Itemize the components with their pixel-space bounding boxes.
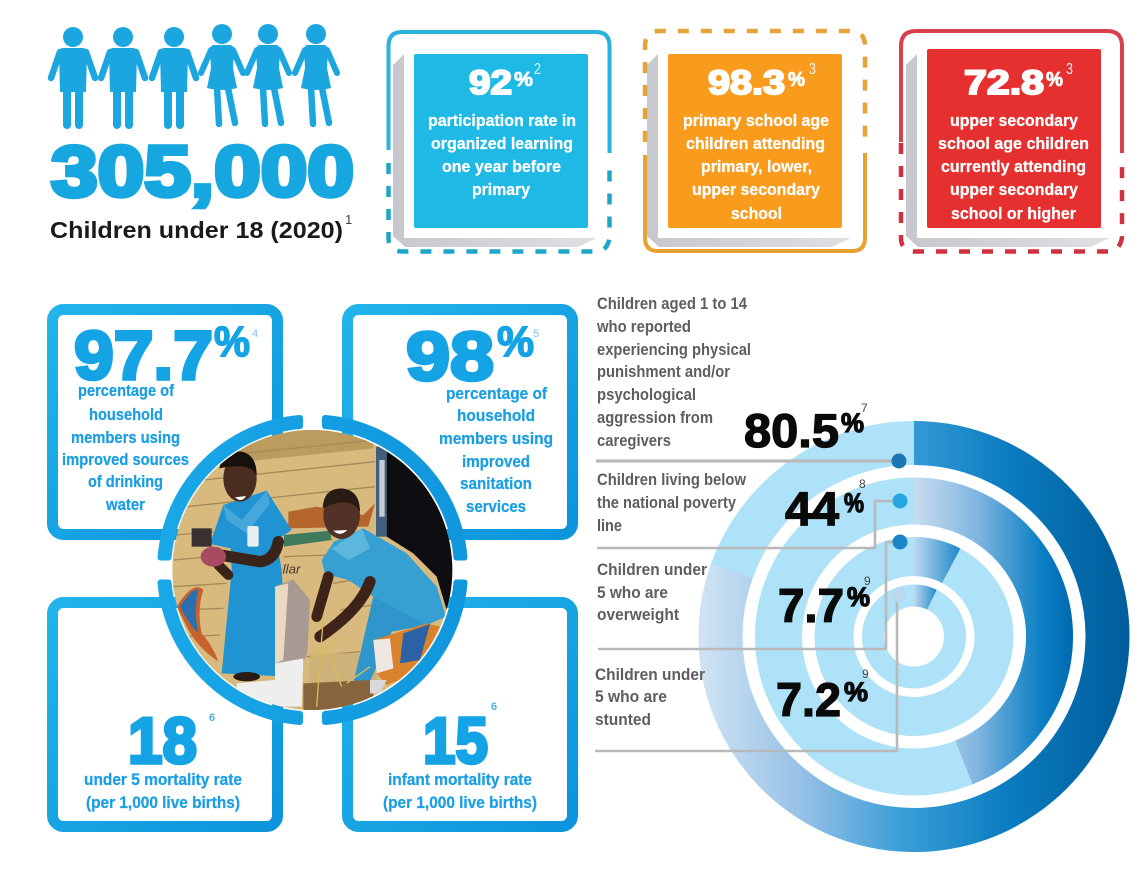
stat: 44% [785,477,866,535]
photo: two schoolgirls in blue uniforms: llar [283,561,301,576]
text: physical punishment label: who reported [596,318,691,336]
stat: 98.3%: % [788,69,805,91]
ring: photo frame arcs [161,418,464,722]
stat: 98.3% [708,61,816,102]
text: participation description: one year before [442,158,561,176]
ring: 80.5% physical punishment or aggression [720,443,1108,830]
stat: 7.2%: 9 [862,667,869,681]
text: drinking water description: household [89,406,163,424]
stat: 15: 15 [423,704,488,777]
stat: 7.2% [776,667,869,726]
text: primary attendance description: primary, lower, [701,158,812,176]
stat: 92%: 92 [469,64,512,102]
panel: upper secondary attendance [901,31,1122,252]
stat: 80.5% [744,401,868,457]
text: drinking water description: water [105,496,146,514]
text: participation description: participation rate in [428,112,576,130]
panel: improved drinking water [52,310,278,534]
stat: 44%: 44 [785,482,839,535]
stat: 18: 6 [209,712,215,724]
text: physical punishment label: caregivers [597,432,671,450]
leader line: 80.5% [596,459,892,463]
headline number: 305,000: 305,000 [51,133,354,212]
text: upper secondary description: school or higher [951,205,1077,223]
text: primary attendance description: children attending [686,135,825,153]
ring: 7.2% stunted [873,596,955,678]
panel: under 5 mortality [52,602,278,826]
icon: boy 2 [101,27,145,125]
text: physical punishment label: punishment and/or [597,363,731,381]
text: drinking water description: members using [71,429,180,447]
panel: improved sanitation [348,310,572,534]
text: sanitation description: percentage of [446,385,547,403]
text: primary attendance description: upper secondary [692,181,821,199]
stat: 7.7%: % [847,582,870,612]
text: sanitation description: sanitation [460,475,532,493]
text: stunted label [595,666,706,729]
stat: 80.5%: 7 [861,401,868,415]
stat: 7.7% [778,574,871,632]
stat: 97.7%: % [214,318,250,366]
stat: 80.5%: % [841,408,864,438]
text: overweight label: overweight [597,606,679,624]
stat: 72.8% [964,61,1073,102]
stat: 98.3%: 3 [809,61,816,78]
text: participation description: organized learning [431,135,573,153]
panel: participation rate [388,32,610,252]
text: sanitation description [439,385,553,516]
panel: infant mortality [348,602,572,826]
text: sanitation description: members using [439,430,553,448]
ring: 44% below poverty line [778,501,1050,772]
text: upper secondary description [938,112,1089,223]
text: primary attendance description [683,112,829,223]
icon: girl 3 [295,24,337,124]
marker dots [892,454,908,602]
text: poverty label: Children living below [597,471,746,489]
text: upper secondary description: school age children [938,135,1089,153]
stat: 7.7%: 7.7 [778,579,844,632]
text: participation description [428,112,576,199]
icon: six children [51,24,337,125]
text: drinking water description [62,382,189,514]
text: drinking water description: improved sources [62,451,189,469]
stat: 80.5%: 80.5 [744,404,839,457]
stat: 98% [406,318,539,395]
stat: 98%: % [497,318,534,366]
text: physical punishment label: psychological [597,386,696,404]
stat: 98%: 5 [533,328,539,340]
stat: 15: 6 [491,701,497,713]
text: drinking water description: of drinking [88,473,163,491]
stat: 72.8%: 72.8 [964,64,1044,102]
leader line: 7.7% [598,542,893,649]
photo: two schoolgirls in blue uniforms [172,430,452,710]
text: overweight label: 5 who are [597,584,668,602]
stat: 44%: 8 [859,477,866,491]
text: overweight label [597,561,708,624]
text: under 5 mortality description: under 5 mortality rate [84,771,242,789]
text: poverty label: the national poverty [597,494,737,512]
text: poverty label [597,471,746,535]
craft and ground [373,623,440,685]
text: stunted label: 5 who are [595,688,667,706]
leader line: 7.2% [595,597,897,751]
girl right [322,528,446,685]
icon: boy 1 [51,27,95,125]
caption: children under 18: 1 [345,212,352,227]
text: upper secondary description: upper secondary [950,181,1079,199]
text: stunted label: Children under [595,666,706,684]
stat: 7.2%: 7.2 [776,673,841,726]
text: poverty label: line [597,517,622,535]
icon: girl 2 [247,24,289,124]
paper board and white stand [275,580,310,664]
text: physical punishment label: experiencing physical [597,341,751,359]
text: overweight label: Children under [597,561,708,579]
text: physical punishment label: Children aged 1 to 14 [597,295,748,313]
icon: girl 1 [201,24,243,124]
stat: 7.7%: 9 [864,574,871,588]
text: sanitation description: improved [462,453,530,471]
stat: 92%: % [514,69,533,91]
stat: 18: 18 [128,704,197,777]
girl left [210,491,292,677]
text: primary attendance description: school [731,205,782,223]
stat: 97.7%: 97.7 [74,317,213,394]
stat: 98%: 98 [406,318,494,395]
text: under 5 mortality description [84,771,242,812]
text: stunted label: stunted [595,711,651,729]
panel: primary school attendance [645,31,865,251]
text: sanitation description: household [457,407,535,425]
text: infant mortality description: infant mortality rate [388,771,532,789]
caption: children under 18: Children under 18 (2020) [50,217,343,243]
leader line: 44% [597,501,893,548]
chart: concentric radial progress rings [720,443,1108,830]
text: upper secondary description: currently attending [941,158,1086,176]
stat: 44%: % [844,488,864,518]
stat: 98.3%: 98.3 [708,64,785,102]
text: sanitation description: services [466,498,526,516]
ring: 7.7% overweight [834,556,994,716]
icon: boy 3 [152,27,196,125]
text: upper secondary description: upper secondary [950,112,1079,130]
stat: 7.2%: % [844,677,868,707]
text: physical punishment label: aggression from [597,409,713,427]
text: infant mortality description: (per 1,000 live births) [383,794,537,812]
text: participation description: primary [472,181,531,199]
stat: 72.8%: 3 [1066,61,1073,78]
text: physical punishment label [596,295,751,450]
stat: 97.7%: 4 [252,328,258,340]
text: infant mortality description [383,771,537,812]
text: primary attendance description: primary school age [683,112,829,130]
text: under 5 mortality description: (per 1,000 live births) [86,794,240,812]
text: drinking water description: percentage of [78,382,174,400]
stat: 92% [469,61,541,102]
stat: 72.8%: % [1046,69,1063,91]
stat: 92%: 2 [534,61,541,78]
